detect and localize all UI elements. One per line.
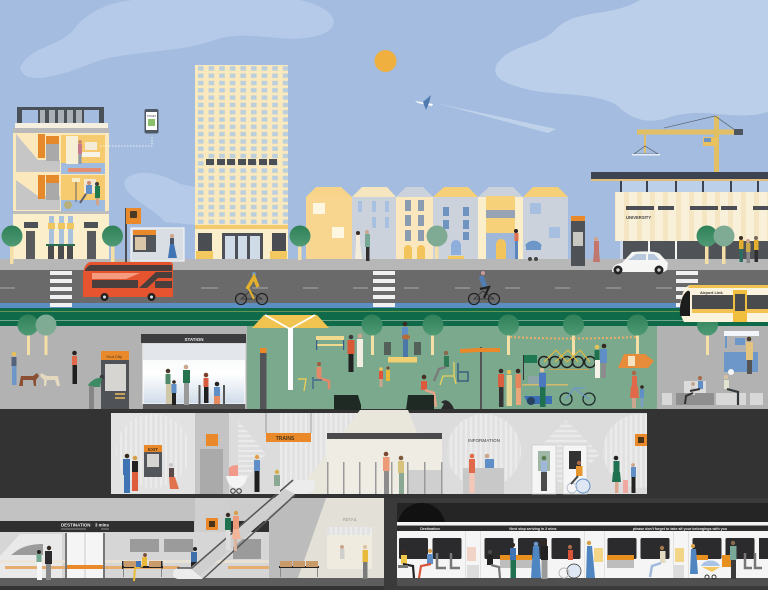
- canal stripe: [0, 303, 768, 308]
- metro passengers: [398, 541, 762, 579]
- retail booth: [327, 517, 372, 579]
- dotted connector: [100, 137, 152, 146]
- information desk: [463, 438, 504, 494]
- light beam: [296, 410, 442, 494]
- park people left: [298, 334, 383, 391]
- car: [612, 251, 668, 274]
- people in concourse: [383, 452, 404, 494]
- underground street: grey left plaza: [0, 326, 247, 410]
- zebra crossing right: [676, 271, 698, 307]
- ground floor: [13, 211, 109, 214]
- picnic bench: [316, 336, 344, 350]
- escalator: [173, 470, 315, 579]
- toilet sign: [635, 434, 647, 446]
- street trees: [2, 226, 734, 264]
- dark benches / light wells: [334, 395, 434, 410]
- information label: INFORMATION: [468, 438, 500, 443]
- university label: UNIVERSITY: [626, 215, 651, 220]
- retail label: RETAIL: [343, 517, 358, 522]
- plaza trees: [18, 314, 718, 355]
- platform people: [36, 546, 197, 581]
- upper apartment: [61, 135, 105, 173]
- dark ground mass: [0, 409, 768, 590]
- platform sign orange: [206, 518, 218, 530]
- building: tall tower: [195, 65, 288, 260]
- park post with orange tip: [260, 348, 266, 409]
- platform benches: [122, 561, 319, 577]
- lift shaft: [195, 413, 229, 494]
- cyclist centre: [468, 271, 500, 304]
- door panels: [465, 531, 689, 579]
- underground street: green park: [247, 326, 657, 410]
- crane: [632, 116, 743, 176]
- bicycle stall: [522, 376, 595, 405]
- floor signs and lifts: [38, 134, 45, 158]
- zebra crossing left: [50, 271, 72, 307]
- windows: [399, 538, 768, 559]
- train windows: [130, 539, 159, 552]
- stairs: [16, 134, 60, 172]
- retail area: [295, 498, 384, 586]
- roof frame: [17, 107, 104, 123]
- bunting: [510, 337, 636, 338]
- concourse level: [111, 410, 687, 494]
- bus stop sign: [125, 208, 141, 262]
- cyclist left: [236, 272, 268, 304]
- metro carriage interior: [397, 522, 768, 586]
- right panel stripes: [280, 413, 358, 494]
- family in concourse: [612, 456, 636, 493]
- smartphone ticket icon: TICKET: [147, 115, 156, 118]
- park seated people: [386, 351, 468, 409]
- people at bike stall: [498, 344, 644, 408]
- left striped circle: [116, 414, 190, 488]
- park orange banner sign: [618, 354, 654, 368]
- direction signpost: [460, 347, 500, 409]
- building: cutaway apartment block: [13, 107, 109, 260]
- exit map sign: [144, 445, 162, 477]
- bike hire rack: [523, 350, 596, 380]
- cloud: behind tower: [124, 173, 196, 225]
- platform left hall: 3 mins: [95, 522, 109, 528]
- green roof strip: [0, 308, 768, 326]
- bus shelter: [131, 228, 184, 261]
- pedestrians on street: [355, 229, 758, 263]
- building: university: [591, 172, 768, 260]
- tram: airport link: Airport Link: [700, 290, 723, 295]
- metro carriage interior: Next stop arriving in 2 mins: [509, 527, 557, 531]
- train carriage: [0, 532, 269, 578]
- platform left hall: DESTINATION: [61, 522, 90, 528]
- terraced houses: [306, 187, 568, 259]
- lower apartment: [61, 175, 105, 211]
- pavement: [0, 259, 768, 270]
- right stripes: [603, 414, 677, 488]
- striped diamond: [238, 420, 266, 490]
- destination board: [0, 521, 194, 532]
- underground street: grey right plaza: [657, 326, 768, 410]
- person reading map: [88, 375, 104, 409]
- cloud: top left: [20, 0, 334, 78]
- atm diamond: [533, 420, 600, 490]
- tram: airport link: [680, 285, 768, 322]
- park canopy: [252, 315, 329, 390]
- smartphone ticket icon: [144, 109, 158, 134]
- pram and parent: [226, 455, 260, 493]
- exit map sign: EXIT: [148, 447, 158, 452]
- sky background: [0, 0, 768, 310]
- station entrance: [141, 334, 246, 409]
- gate area: [327, 434, 442, 494]
- station label: STATION: [184, 337, 204, 342]
- trains sign: TRAINS: [276, 436, 295, 442]
- route kiosk: [571, 216, 585, 266]
- street food cart: [724, 331, 759, 375]
- ticket machines: [532, 445, 590, 494]
- train doors: [65, 533, 105, 578]
- platform left hall: [0, 498, 384, 590]
- city map kiosk: [101, 351, 129, 409]
- people with dogs: [12, 351, 77, 386]
- music stage: [384, 322, 421, 362]
- people at exit: [123, 454, 179, 493]
- city map kiosk: Your City: [106, 354, 122, 359]
- airplane and contrail: [415, 95, 556, 133]
- road: [0, 270, 768, 303]
- orange seats: [500, 555, 732, 567]
- information circle: [447, 414, 521, 488]
- sun: [374, 50, 396, 72]
- cloud: top right: [495, 0, 768, 121]
- plaza seating: [662, 375, 763, 405]
- zebra crossing centre: [373, 271, 395, 307]
- carriage message board: Destination: [420, 527, 440, 531]
- train tunnel right: [384, 498, 768, 590]
- metro carriage interior: please don't forget to take all your belongings with you: [633, 527, 727, 531]
- platform floor: [0, 578, 384, 586]
- bus: [83, 262, 173, 301]
- road centre markings: [0, 287, 768, 289]
- trains sign: [266, 413, 311, 442]
- floor: [397, 578, 768, 586]
